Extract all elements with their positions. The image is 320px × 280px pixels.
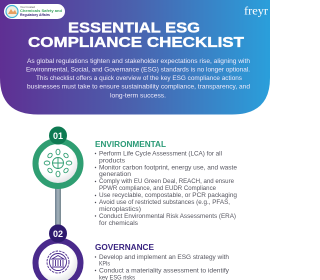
- checklist: environmental: Use recyclable, compostable, or PCR packaging: [99, 192, 237, 199]
- title: ESSENTIAL ESG: [68, 20, 200, 36]
- icon: globe with leaves: [44, 149, 72, 177]
- step 01 marker: 01: [53, 131, 63, 141]
- title: COMPLIANCE CHECKLIST: [28, 35, 244, 51]
- section: governance: [95, 243, 230, 280]
- heading: governance: GOVERNANCE: [95, 243, 155, 252]
- checklist: governance: KPIs: [99, 260, 110, 268]
- badge: chemicals safety and regulatory affairs: Your trusted: [20, 5, 35, 9]
- panel: header banner: [0, 0, 270, 114]
- checklist: governance: Develop and implement an ESG strategy with: [99, 254, 229, 261]
- checklist: governance: Conduct a materiality assessment to identify: [99, 268, 230, 274]
- section: environmental: [95, 140, 238, 227]
- checklist: environmental: Comply with EU Green Deal, REACH, and ensure: [99, 178, 235, 185]
- checklist: environmental: Monitor carbon footprint, energy use, and waste: [99, 164, 238, 171]
- intro paragraph: As global regulations tighten and stakeholder expectations rise, aligning with: [27, 58, 250, 65]
- checklist: environmental: Avoid use of restricted substances (e.g., PFAS,: [99, 199, 230, 206]
- heading: environmental: ENVIRONMENTAL: [95, 140, 166, 149]
- step 02 marker: 02: [53, 229, 63, 239]
- checklist: environmental: [95, 150, 238, 227]
- logo: freyr: freyr: [244, 4, 268, 18]
- connector between steps: [55, 186, 61, 230]
- intro paragraph: businesses must take to ensure sustainability compliance, transparency, and: [27, 84, 250, 91]
- checklist: governance: [95, 254, 230, 280]
- checklist: environmental: PPWR compliance, and EUDR Compliance: [99, 185, 217, 192]
- title: [28, 20, 244, 51]
- intro paragraph: [26, 58, 250, 100]
- icon: institution in gear: [47, 251, 69, 273]
- checklist: environmental: Conduct Environmental Risk Assessments (ERA): [99, 213, 236, 220]
- intro paragraph: long-term success.: [110, 92, 166, 100]
- intro paragraph: This checklist offers a quick overview of the key ESG compliance actions: [36, 75, 242, 82]
- intro paragraph: Environmental, Social, and Governance (ESG) standards is no longer optional.: [26, 66, 250, 74]
- badge: chemicals safety and regulatory affairs: Regulatory Affairs: [20, 13, 50, 17]
- checklist: environmental: for chemicals: [99, 220, 138, 227]
- badge: chemicals safety and regulatory affairs: Chemicals Safety and: [20, 9, 63, 13]
- step 02 marker: [36, 224, 80, 280]
- step 01 marker: [36, 126, 80, 186]
- badge: chemicals safety and regulatory affairs: [4, 4, 65, 19]
- checklist: environmental: microplastics): [99, 206, 141, 213]
- checklist: environmental: generation: [99, 171, 131, 178]
- checklist: environmental: products: [99, 157, 125, 164]
- checklist: environmental: Perform Life Cycle Assessment (LCA) for all: [99, 150, 222, 158]
